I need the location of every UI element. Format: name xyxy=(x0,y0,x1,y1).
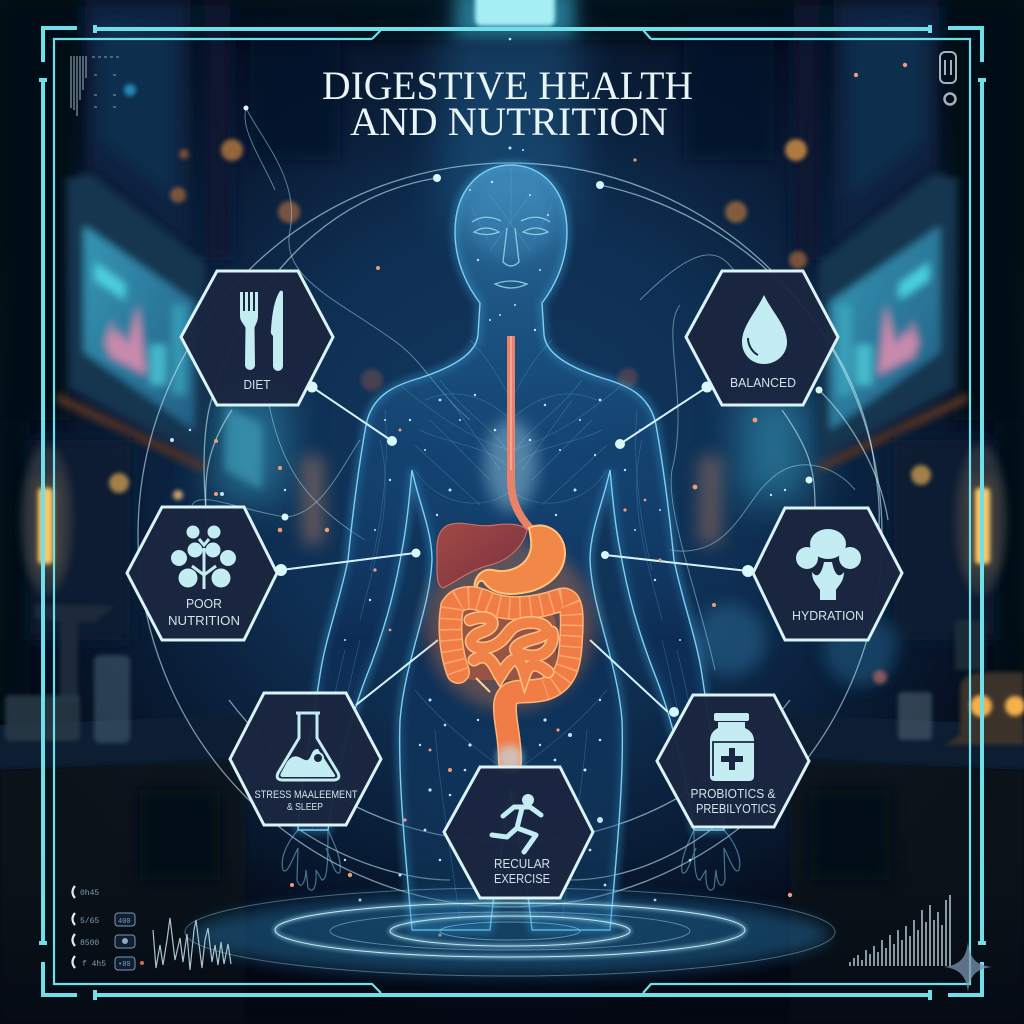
label: stress management: STRESS MAALEEMENT xyxy=(254,789,358,801)
organ: glow behind digestive tract xyxy=(425,540,595,710)
node: orbit dots xyxy=(244,106,822,520)
hex panel: diet xyxy=(181,271,333,405)
orbit lines and wisps xyxy=(138,108,888,907)
floor glow xyxy=(190,895,830,975)
hud: sparkle star xyxy=(944,942,992,992)
warm particles xyxy=(214,63,907,937)
label: balanced: BALANCED xyxy=(730,375,796,390)
body: head highlight xyxy=(467,169,555,261)
hud: bottom-left readouts: 400 xyxy=(118,918,131,926)
icon: flask xyxy=(277,713,339,780)
frame: side bars xyxy=(39,78,986,943)
wisps: flowing curves xyxy=(192,108,855,670)
label: probiotics: PROBIOTICS & xyxy=(690,786,776,801)
body: left hand xyxy=(282,830,340,890)
hud: top-right pill and ring xyxy=(940,52,956,104)
connector: poor nutrition xyxy=(275,548,420,576)
hex panel: regular exercise: EXERCISE xyxy=(494,871,550,886)
frame: top bar xyxy=(95,25,930,33)
orbit: inner arcs xyxy=(204,178,888,880)
title: DIGESTIVE HEALTH xyxy=(322,63,693,108)
background: right monitor xyxy=(819,172,968,472)
icon: broccoli xyxy=(796,529,861,600)
background: left lab bench xyxy=(0,604,245,1024)
icon: fork and knife xyxy=(240,291,283,371)
digestive system xyxy=(425,336,595,771)
body: chest glow xyxy=(485,419,537,511)
organ: appendix xyxy=(476,678,490,692)
hud: bottom-left readouts: 8500 xyxy=(80,939,99,948)
connector: hydration xyxy=(601,551,754,577)
orbit: large circle xyxy=(138,163,882,907)
label: diet: DIET xyxy=(244,377,271,392)
background: microscope xyxy=(35,604,115,700)
body: translucent silhouette xyxy=(298,165,724,930)
label: poor nutrition: POOR xyxy=(186,596,222,611)
background: upper dark panels xyxy=(0,0,1024,420)
title xyxy=(322,63,693,144)
hex panel: stress management xyxy=(230,693,381,825)
background: left monitor xyxy=(56,172,262,490)
background: glass jar xyxy=(94,655,130,743)
label: regular exercise: RECULAR xyxy=(494,856,550,871)
background: right jar xyxy=(898,692,932,740)
organ: small intestine base xyxy=(458,608,556,680)
hex panel: probiotics: PREBILYOTICS xyxy=(696,801,776,816)
floor rings xyxy=(185,888,835,976)
organ: liver xyxy=(437,523,527,588)
title: AND NUTRITION xyxy=(350,99,668,144)
floor hologram rings xyxy=(185,888,835,976)
connector: balanced xyxy=(615,382,712,449)
frame: bottom bar xyxy=(95,990,930,1000)
background: centre light column xyxy=(440,20,580,220)
background: floor shading xyxy=(0,860,1024,1024)
hex panel: regular exercise xyxy=(444,767,593,898)
body: chest and muscle lines xyxy=(312,168,710,920)
icon: medicine bottle xyxy=(710,713,754,781)
body: right hand xyxy=(682,830,740,890)
hud: bottom-left readouts: f 4h5 xyxy=(82,960,106,969)
hex panel: hydration xyxy=(753,508,902,640)
label: hydration: HYDRATION xyxy=(792,608,864,623)
background: right lab bench xyxy=(790,620,1024,1024)
hud: top-left barcode xyxy=(71,56,122,116)
connector: stress xyxy=(356,640,438,705)
hex panel: balanced xyxy=(686,271,838,405)
human body hologram xyxy=(282,165,740,930)
organ: stomach xyxy=(474,525,565,594)
hud: bottom-left readouts: 5/65 xyxy=(80,917,99,926)
background: left amber lamp xyxy=(21,445,73,595)
hud: bottom-left readouts: •80 xyxy=(118,961,131,969)
background: side columns and glow panels xyxy=(0,420,1024,720)
icon: runner xyxy=(492,794,541,852)
hud: bottom-left readouts xyxy=(72,886,144,970)
connector lines with nodes xyxy=(244,106,822,717)
icon: water drop xyxy=(742,295,787,364)
organ: esophagus xyxy=(511,336,530,528)
star particles xyxy=(170,38,786,901)
hex panel: poor nutrition xyxy=(127,507,277,640)
body: face features xyxy=(472,217,550,288)
organ: large intestine xyxy=(450,598,572,762)
hex panel: poor nutrition: NUTRITION xyxy=(168,613,240,628)
connector: probiotics xyxy=(590,640,679,717)
hex panel: stress management: & SLEEP xyxy=(287,801,323,813)
icon: tree xyxy=(171,526,236,589)
background: mid teal screen reflections xyxy=(215,390,810,500)
organ: rectal sparkle xyxy=(497,745,523,771)
hud: bottom-right spectrum bars xyxy=(850,895,950,966)
hud: bottom-left readouts: 0h45 xyxy=(80,889,99,898)
background: amber device xyxy=(945,672,1024,745)
hex panel: probiotics xyxy=(657,695,809,827)
background: right amber lamp xyxy=(955,445,1007,595)
body: outer glow xyxy=(298,165,724,930)
connector: diet xyxy=(306,382,397,446)
hud: bottom-left waveform xyxy=(153,918,231,970)
background: ceiling lamp xyxy=(455,0,575,35)
organ: small intestine xyxy=(470,617,553,676)
background: bokeh lights xyxy=(109,84,931,684)
